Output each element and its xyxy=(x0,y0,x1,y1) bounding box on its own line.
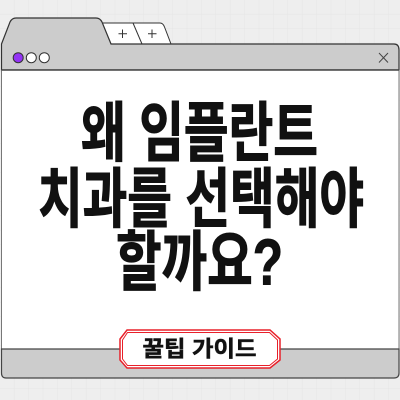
window control dots xyxy=(13,53,49,63)
bottom bar xyxy=(2,349,399,378)
white dot xyxy=(26,53,36,63)
title line 1: 왜 임플란트 xyxy=(81,96,318,170)
badge label: 꿀팁 가이드 xyxy=(142,336,256,362)
badge frame xyxy=(120,330,280,368)
title bar with active tab xyxy=(2,18,399,70)
title line 3: 할까요? xyxy=(116,226,283,298)
title xyxy=(38,96,364,298)
white dot xyxy=(39,53,49,63)
purple dot xyxy=(13,53,23,63)
badge xyxy=(120,330,280,368)
window side edges xyxy=(2,70,399,349)
icon: plus xyxy=(118,30,127,38)
icon: close xyxy=(379,53,388,62)
icon: plus xyxy=(148,30,156,38)
window body xyxy=(2,70,399,349)
inactive tabs xyxy=(102,23,171,44)
